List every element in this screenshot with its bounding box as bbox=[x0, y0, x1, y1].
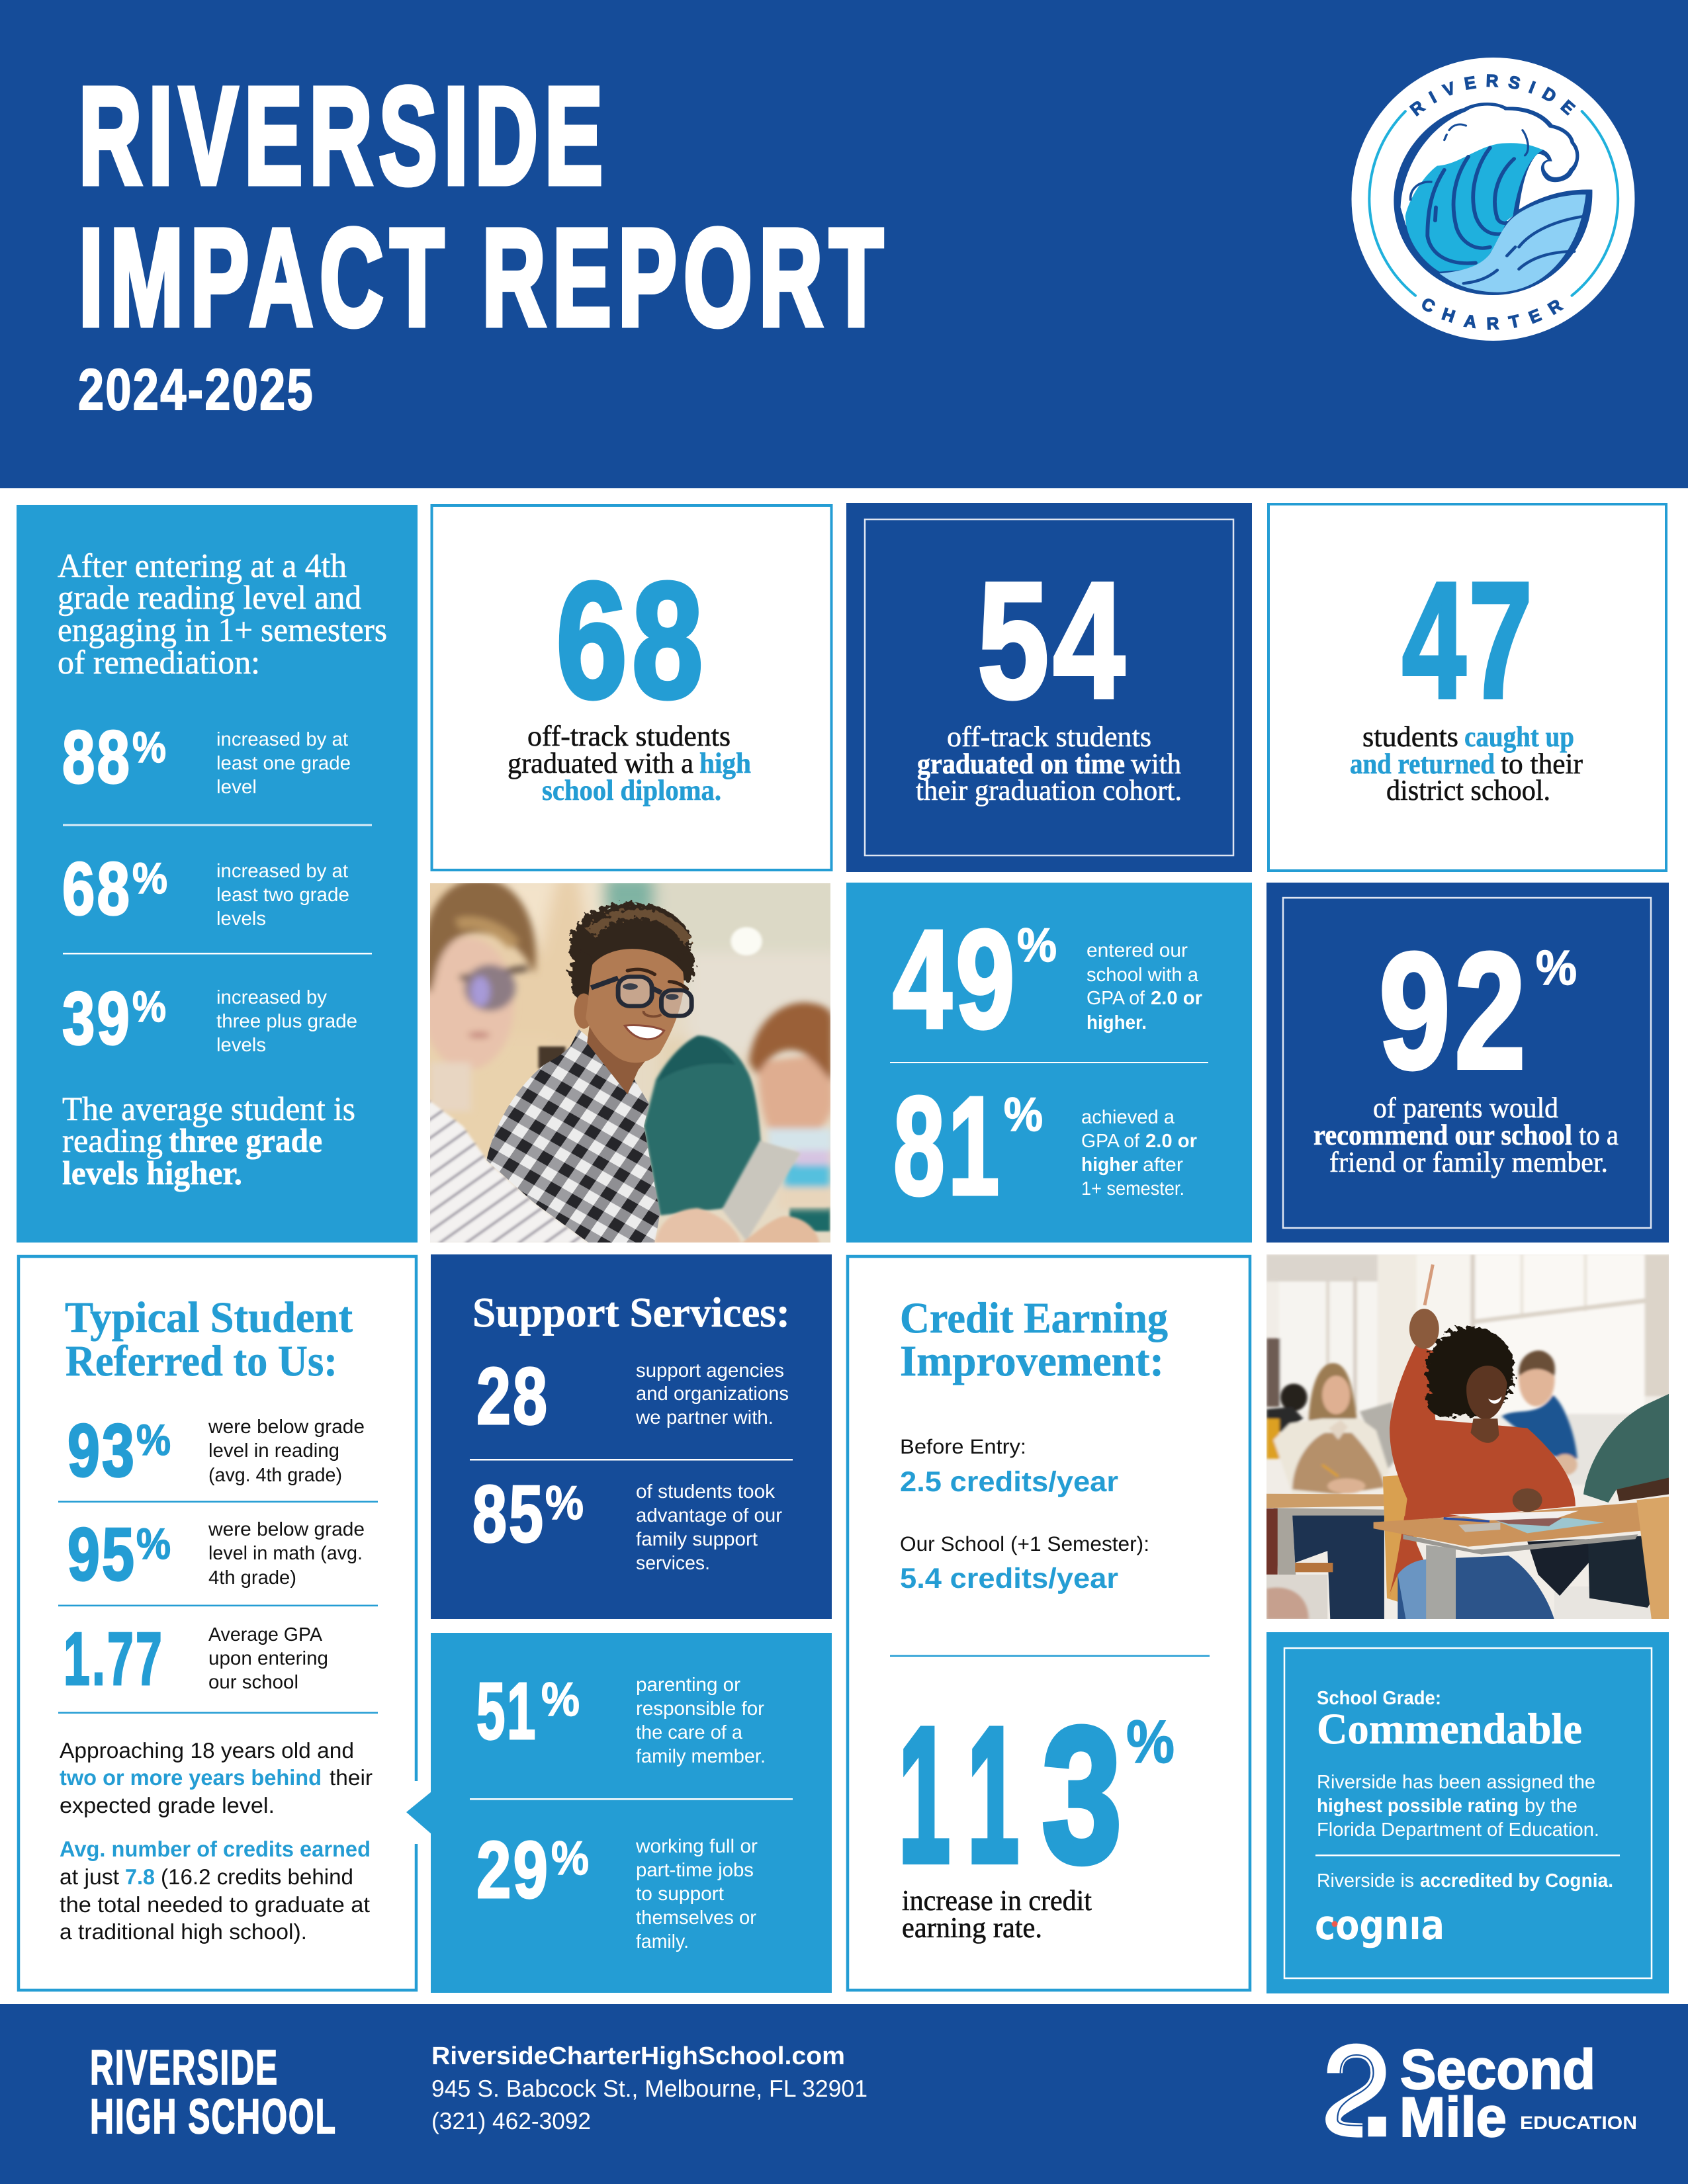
before entry rate: Before Entry: bbox=[900, 1435, 1026, 1458]
paragraph: age and grade: their bbox=[330, 1765, 373, 1790]
caption: increase in credit bbox=[902, 1884, 1092, 1917]
desk and materials bbox=[1374, 1503, 1641, 1547]
left student bbox=[422, 879, 536, 1112]
paragraph: age and grade: Approaching 18 years old and bbox=[60, 1738, 354, 1763]
stat: 29% bbox=[476, 1825, 758, 1952]
icon: numeral 2 bbox=[1333, 2050, 1386, 2136]
stat: 39%: increased by bbox=[216, 987, 327, 1008]
heading: Typical Student bbox=[65, 1293, 353, 1342]
stat: 28: support agencies bbox=[636, 1360, 784, 1381]
stat: 28: and organizations bbox=[636, 1383, 789, 1405]
stat: 88%: % bbox=[132, 722, 166, 771]
stat: 51%: family member. bbox=[636, 1746, 766, 1767]
caption: high bbox=[699, 747, 751, 779]
intro text: engaging in 1+ semesters bbox=[58, 612, 387, 649]
intro text bbox=[58, 548, 387, 681]
heading: Improvement: bbox=[900, 1337, 1164, 1385]
intro text: After entering at a 4th bbox=[58, 548, 347, 585]
paragraph: credits earned: at just bbox=[60, 1864, 119, 1889]
caption bbox=[902, 1884, 1092, 1944]
stat: 68%: least two grade bbox=[216, 885, 349, 906]
photo: smiling student with glasses bbox=[430, 883, 830, 1243]
subtitle: year: 2024-2025 bbox=[78, 357, 314, 422]
caption: off-track students bbox=[947, 721, 1151, 753]
stat: 85%: services. bbox=[636, 1553, 710, 1574]
our school rate: 5.4 credits/year bbox=[900, 1563, 1118, 1594]
contact details: 945 S. Babcock St., Melbourne, FL 32901 bbox=[431, 2075, 867, 2102]
stat: 88%: level bbox=[216, 777, 257, 798]
stat: 81%: after bbox=[1143, 1155, 1183, 1176]
paragraph: credits earned: Avg. number of credits earned bbox=[60, 1837, 371, 1861]
jeans and right student lower bbox=[1527, 1539, 1591, 1596]
panel: GPA statistics bbox=[846, 883, 1252, 1243]
desk left and chair bbox=[1257, 1474, 1670, 1622]
panel: reading remediation results bbox=[17, 505, 418, 1243]
teal hoodie student bbox=[644, 1035, 830, 1231]
caption: students bbox=[1362, 721, 1458, 753]
stat: 39% bbox=[62, 977, 357, 1060]
stat: 93% bbox=[67, 1409, 365, 1492]
caption: graduated with a bbox=[508, 747, 693, 779]
stat: 81%: GPA of bbox=[1081, 1131, 1140, 1152]
stat: 95%: % bbox=[136, 1519, 171, 1568]
grade heading: Commendable bbox=[1317, 1705, 1582, 1753]
big number 113% bbox=[899, 1688, 1175, 1902]
stat: 1.77 bbox=[64, 1617, 328, 1700]
rating description: Riverside has been assigned the bbox=[1317, 1772, 1595, 1793]
stat: 88%: least one grade bbox=[216, 753, 351, 774]
panel: support services bbox=[431, 1254, 832, 1619]
striped shirt bbox=[427, 1099, 590, 1243]
stat: 51%: responsible for bbox=[636, 1698, 764, 1720]
conclusion text bbox=[62, 1091, 355, 1192]
grade heading: School Grade: bbox=[1317, 1688, 1441, 1709]
stat: 39%: % bbox=[132, 982, 166, 1031]
big number 113%: 1 bbox=[967, 1688, 1019, 1902]
stat: 85%: family support bbox=[636, 1529, 758, 1550]
stat: 29%: family. bbox=[636, 1931, 689, 1952]
caption: friend or family member. bbox=[1329, 1146, 1608, 1178]
stat: 49%: higher. bbox=[1087, 1012, 1147, 1033]
stat: 95%: level in math (avg. bbox=[208, 1543, 363, 1564]
heading bbox=[65, 1293, 353, 1385]
stat: 93%: % bbox=[136, 1415, 171, 1464]
stat: 39%: three plus grade bbox=[216, 1011, 357, 1032]
big number 47: 47 bbox=[1402, 548, 1535, 732]
stat: 29%: themselves or bbox=[636, 1907, 756, 1929]
stat: 29%: % bbox=[551, 1832, 589, 1885]
stat: 88%: 88 bbox=[62, 715, 132, 799]
stat: 81% bbox=[893, 1067, 1197, 1224]
logo: Cognia: cognia bbox=[1315, 1901, 1444, 1949]
big number 68: 68 bbox=[556, 548, 707, 732]
caption: district school. bbox=[1386, 774, 1550, 807]
logo: Second Mile Education: EDUCATION bbox=[1520, 2113, 1637, 2133]
caption: graduated on time bbox=[917, 748, 1125, 780]
logo: Second Mile Education: Mile bbox=[1399, 2086, 1507, 2149]
stat: 68%: levels bbox=[216, 908, 266, 930]
photo: student raising hand in class bbox=[1266, 1254, 1669, 1619]
panel: credit earning improvement bbox=[848, 1256, 1250, 1990]
stat: 1.77: our school bbox=[208, 1672, 298, 1693]
stat: 93%: 93 bbox=[67, 1409, 136, 1492]
big number 92%: % bbox=[1536, 940, 1577, 995]
stat: 49%: 49 bbox=[893, 900, 1018, 1057]
stat: 51%: 51 bbox=[476, 1666, 537, 1756]
stat: 49%: GPA of bbox=[1087, 988, 1145, 1009]
panel: 92% of parents recommend bbox=[1266, 883, 1669, 1243]
accreditation text: Riverside is bbox=[1317, 1870, 1414, 1892]
panel: family responsibilities with pointer bbox=[406, 1633, 832, 1993]
logo: Second Mile Education: Second bbox=[1400, 2038, 1595, 2101]
stat: 39%: 39 bbox=[62, 977, 132, 1060]
stat: 29%: part-time jobs bbox=[636, 1860, 754, 1881]
paragraph: credits earned: (16.2 credits behind bbox=[161, 1864, 353, 1889]
intro text: grade reading level and bbox=[58, 580, 361, 617]
heading: Support Services: bbox=[472, 1289, 790, 1336]
our school rate: Our School (+1 Semester): bbox=[900, 1532, 1149, 1555]
our school rate bbox=[900, 1532, 1149, 1594]
before entry rate: 2.5 credits/year bbox=[900, 1466, 1118, 1498]
stat: 1.77: upon entering bbox=[208, 1648, 328, 1669]
caption: of parents would bbox=[1373, 1092, 1558, 1124]
contact details: (321) 462-3092 bbox=[431, 2107, 591, 2134]
conclusion text: reading bbox=[62, 1123, 163, 1160]
big number 113%: 1 bbox=[899, 1688, 950, 1902]
panel: school grade and accreditation bbox=[1266, 1632, 1669, 1993]
caption: to their bbox=[1501, 748, 1583, 780]
stat: 49%: % bbox=[1017, 919, 1057, 972]
icon: wave bbox=[1394, 103, 1592, 295]
stat: 85%: of students took bbox=[636, 1481, 776, 1503]
accreditation text bbox=[1317, 1870, 1613, 1892]
school name: RIVERSIDE bbox=[90, 2040, 279, 2095]
tablet and hand bbox=[654, 1141, 819, 1243]
stat: 95%: were below grade bbox=[208, 1519, 365, 1540]
stat: 81%: 2.0 or bbox=[1145, 1131, 1197, 1152]
stat: 81%: 1+ semester. bbox=[1081, 1178, 1184, 1200]
footer band bbox=[0, 2004, 1688, 2184]
paragraph: credits earned: 7.8 bbox=[125, 1864, 155, 1889]
caption: school diploma. bbox=[542, 774, 721, 807]
logo: Riverside Charter badge: CHARTER bbox=[1422, 298, 1564, 330]
stat: 81%: 81 bbox=[893, 1067, 1002, 1224]
conclusion text: The average student is bbox=[62, 1091, 355, 1128]
right student bbox=[1583, 1394, 1669, 1608]
stat: 93%: (avg. 4th grade) bbox=[208, 1465, 342, 1486]
caption: earning rate. bbox=[902, 1911, 1042, 1944]
stat: 39%: levels bbox=[216, 1035, 266, 1056]
paragraph: credits earned: the total needed to graduate at bbox=[60, 1892, 370, 1917]
stat: 28 bbox=[476, 1351, 789, 1441]
before entry rate bbox=[900, 1435, 1118, 1498]
caption: recommend our school bbox=[1313, 1119, 1572, 1151]
stat: 28: we partner with. bbox=[635, 1407, 774, 1428]
rating description: highest possible rating bbox=[1317, 1796, 1519, 1817]
stat: 85%: 85 bbox=[472, 1469, 545, 1559]
stat: 85% bbox=[472, 1469, 782, 1574]
caption: and returned bbox=[1350, 748, 1495, 780]
caption: with bbox=[1131, 748, 1181, 780]
stat: 85%: advantage of our bbox=[636, 1505, 782, 1526]
panel: 68 high school diploma bbox=[431, 505, 831, 870]
stat: 68%: 68 bbox=[62, 847, 132, 930]
caption: to a bbox=[1579, 1119, 1619, 1151]
stat: 88%: increased by at bbox=[216, 729, 348, 750]
school name: HIGH SCHOOL bbox=[90, 2089, 337, 2144]
paragraph: age and grade: expected grade level. bbox=[60, 1793, 275, 1817]
paragraph: credits earned bbox=[60, 1837, 371, 1944]
stat: 95%: 95 bbox=[67, 1512, 136, 1596]
stat: 51%: % bbox=[541, 1673, 580, 1726]
stat: 29%: working full or bbox=[635, 1836, 758, 1857]
stat: 68% bbox=[62, 847, 349, 930]
arrow pointer bbox=[406, 1792, 431, 1834]
stat: 49%: school with a bbox=[1087, 965, 1199, 986]
title: RIVERSIDE bbox=[79, 60, 609, 213]
center student bbox=[486, 1029, 660, 1243]
stat: 81%: % bbox=[1004, 1088, 1043, 1141]
big number 92%: 92 bbox=[1379, 918, 1530, 1103]
paragraph: credits earned: a traditional high school). bbox=[60, 1919, 307, 1944]
stat: 68%: % bbox=[132, 853, 167, 902]
logo: Riverside Charter badge bbox=[1351, 58, 1634, 341]
stat: 88% bbox=[62, 715, 351, 799]
intro text: of remediation: bbox=[58, 644, 260, 681]
stat: 81%: achieved a bbox=[1081, 1107, 1175, 1128]
stat: 49%: entered our bbox=[1087, 940, 1188, 961]
logo: Riverside Charter badge: RIVERSIDE bbox=[1409, 74, 1576, 116]
stat: 93%: were below grade bbox=[208, 1417, 365, 1438]
panel: 47 caught up bbox=[1268, 504, 1666, 871]
stat: 49%: 2.0 or bbox=[1151, 988, 1202, 1009]
stat: 29%: 29 bbox=[476, 1825, 550, 1915]
panel: 54 graduated on time bbox=[846, 503, 1252, 872]
big number 113%: 3 bbox=[1042, 1688, 1122, 1902]
stat: 81%: higher bbox=[1081, 1155, 1138, 1176]
heading bbox=[900, 1294, 1168, 1385]
rating description: by the bbox=[1525, 1796, 1577, 1817]
contact details bbox=[431, 2042, 867, 2134]
stat: 85%: % bbox=[545, 1477, 584, 1530]
rating description: Florida Department of Education. bbox=[1317, 1819, 1599, 1841]
school name bbox=[90, 2040, 337, 2144]
caption: their graduation cohort. bbox=[916, 774, 1182, 807]
stat: 93%: level in reading bbox=[208, 1440, 339, 1462]
big number 54: 54 bbox=[977, 548, 1129, 732]
stat: 51%: the care of a bbox=[636, 1722, 743, 1743]
panel: typical student referred to us bbox=[19, 1256, 416, 1990]
title bbox=[79, 60, 890, 355]
logo: Second Mile Education bbox=[1333, 2038, 1637, 2149]
stat: 68%: increased by at bbox=[216, 861, 348, 882]
heading: Credit Earning bbox=[900, 1294, 1168, 1342]
stat: 51% bbox=[476, 1666, 766, 1767]
conclusion text: three grade bbox=[169, 1123, 322, 1160]
caption: caught up bbox=[1464, 721, 1574, 753]
heading: Referred to Us: bbox=[66, 1337, 337, 1385]
stat: 1.77: Average GPA bbox=[208, 1624, 323, 1645]
contact details: RiversideCharterHighSchool.com bbox=[431, 2042, 845, 2070]
big number 113%: % bbox=[1126, 1708, 1175, 1776]
main student bbox=[1390, 1345, 1576, 1598]
title: IMPACT REPORT bbox=[79, 201, 890, 355]
header band bbox=[0, 0, 1688, 488]
caption bbox=[508, 720, 751, 807]
accreditation text: accredited by Cognia. bbox=[1420, 1870, 1613, 1892]
paragraph: age and grade bbox=[60, 1738, 373, 1817]
caption: off-track students bbox=[527, 720, 731, 752]
stat: 95% bbox=[67, 1512, 365, 1596]
background students bbox=[1266, 1350, 1577, 1494]
stat: 51%: parenting or bbox=[636, 1675, 740, 1696]
stat: 28: 28 bbox=[476, 1351, 549, 1441]
caption bbox=[916, 721, 1182, 807]
caption bbox=[1313, 1092, 1619, 1178]
caption bbox=[1350, 721, 1583, 807]
rating description bbox=[1317, 1772, 1599, 1841]
stat: 1.77: 1.77 bbox=[64, 1617, 164, 1700]
paragraph: age and grade: two or more years behind bbox=[60, 1765, 322, 1790]
conclusion text: levels higher. bbox=[62, 1155, 242, 1192]
stat: 29%: to support bbox=[636, 1884, 724, 1905]
stat: 49% bbox=[893, 900, 1202, 1057]
stat: 95%: 4th grade) bbox=[208, 1567, 296, 1589]
